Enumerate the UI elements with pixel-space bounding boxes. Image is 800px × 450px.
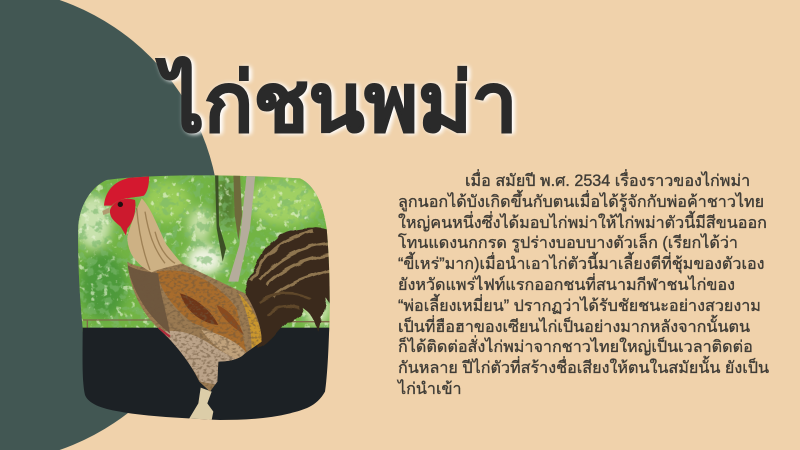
body text: ลูกนอกได้บังเกิดขึ้นกับตนเมื่อได้รู้จักกับพ่อค้าชาวไทย bbox=[398, 193, 764, 211]
body text bbox=[396, 169, 769, 398]
black wall bbox=[82, 328, 330, 420]
body text: เป็นที่ฮือฮาของเซียนไก่เป็นอย่างมากหลังจากนั้นตน bbox=[398, 318, 750, 336]
body text: ยังหวัดแพร่ไฟท์แรกออกชนที่สนามกีฬาชนไก่ของ bbox=[398, 276, 735, 294]
body bbox=[128, 262, 262, 392]
rail bbox=[83, 320, 330, 328]
tail feathers bbox=[245, 228, 332, 348]
title: ไก่ชนพม่า bbox=[163, 58, 518, 149]
body text: โทนแดงนกกรด รูปร่างบอบบางตัวเล็ก (เรียกได้ว่า bbox=[398, 234, 738, 252]
foliage background bbox=[78, 175, 330, 332]
photo: rooster bbox=[78, 175, 330, 420]
body text: เมื่อ สมัยปี พ.ศ. 2534 เรื่องราวของไก่พม่า bbox=[465, 172, 750, 190]
body text: กันหลาย ปีไก่ตัวที่สร้างชื่อเสียงให้ตนในสมัยนั้น ยังเป็น bbox=[398, 359, 769, 377]
body text: ก็ได้ติดต่อสั่งไก่พม่าจากชาวไทยใหญ่เป็นเวลาติดต่อ bbox=[398, 338, 753, 356]
comb and head bbox=[102, 175, 149, 236]
body text: “พ่อเลี้ยงเหมี่ยน” ปรากฏว่าได้รับชัยชนะอย่างสวยงาม bbox=[398, 297, 761, 315]
leg bbox=[188, 388, 213, 420]
tree trunks bbox=[215, 174, 255, 282]
body text: ไก่นำเข้า bbox=[398, 380, 462, 398]
neck hackle bbox=[127, 198, 182, 272]
body text: ใหญ่คนหนึ่งซึ่งได้มอบไก่พม่าให้ไก่พม่าตัวนี้มีสีขนออก bbox=[398, 214, 767, 232]
body text: “ขี้เหร่”มาก)เมื่อนำเอาไก่ตัวนี้มาเลี้ยงตีที่ชุ้มของตัวเอง bbox=[398, 255, 765, 273]
